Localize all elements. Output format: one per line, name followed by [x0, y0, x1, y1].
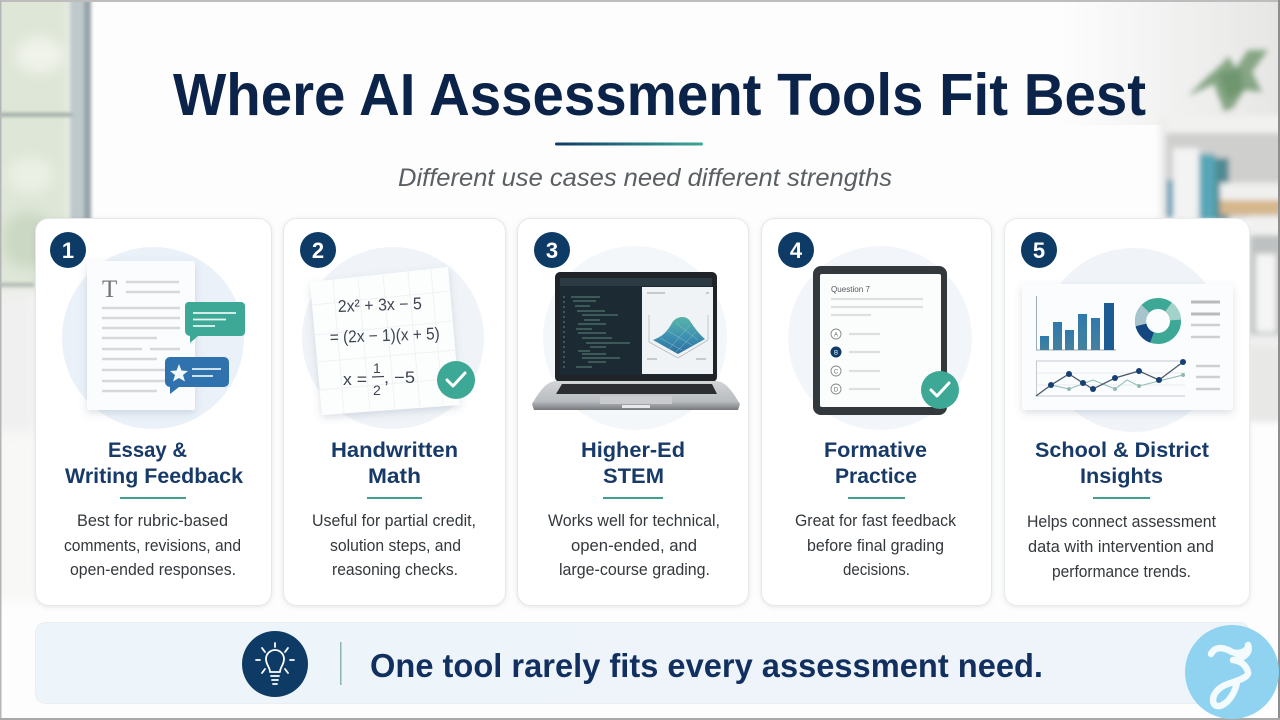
- heading: [824, 438, 927, 488]
- number badge 3: 3: [546, 238, 558, 263]
- description: reasoning checks.: [332, 561, 458, 579]
- panel: school and district insights: [1004, 218, 1250, 606]
- heading rule: [603, 497, 663, 499]
- icon: handwritten math paper: , −5: [384, 368, 415, 387]
- number badge 5: 5: [1033, 238, 1045, 263]
- heading: Insights: [1080, 464, 1163, 488]
- number badge 1: [50, 232, 86, 268]
- callout text: One tool rarely fits every assessment need.: [370, 647, 1043, 684]
- description: [312, 512, 476, 579]
- icon: tablet quiz: D: [834, 388, 839, 394]
- illustration backdrop circle: [788, 246, 972, 430]
- icon: essay document: T: [102, 276, 117, 303]
- icon: handwritten math paper: [310, 267, 460, 415]
- icon: tablet quiz: [813, 266, 947, 415]
- number badge 2: 2: [312, 238, 324, 263]
- illustration backdrop circle: [302, 247, 484, 429]
- description: Great for fast feedback: [795, 512, 957, 530]
- heading: Math: [368, 464, 421, 488]
- icon: handwritten math paper: 2: [373, 382, 381, 398]
- number badge 5: [1021, 232, 1057, 268]
- description: [1027, 513, 1216, 581]
- description: comments, revisions, and: [64, 537, 241, 555]
- icon: blue star comment bubble: [165, 357, 229, 394]
- icon: check badge: [921, 371, 959, 409]
- illustration backdrop circle: [62, 247, 244, 429]
- description: open-ended, and: [571, 537, 697, 555]
- icon: check badge: [437, 361, 475, 399]
- icon: tablet quiz: Question 7: [831, 284, 870, 294]
- heading: School & District: [1035, 438, 1209, 462]
- description: Works well for technical,: [548, 512, 720, 530]
- number badge 3: [534, 232, 570, 268]
- panel: handwritten math: [284, 218, 506, 606]
- bar chart: [1036, 296, 1116, 350]
- description: Helps connect assessment: [1027, 513, 1216, 531]
- heading: STEM: [603, 464, 664, 488]
- subtitle: Different use cases need different strengths: [398, 164, 892, 192]
- heading: Essay &: [108, 438, 187, 462]
- description: [548, 512, 720, 579]
- description: solution steps, and: [330, 537, 461, 555]
- icon: light bulb: [242, 631, 308, 697]
- icon: handwritten math paper: 2x² + 3x − 5: [337, 294, 422, 316]
- heading: Formative: [824, 438, 927, 462]
- number badge 2: [300, 232, 336, 268]
- description: performance trends.: [1052, 563, 1191, 581]
- logo badge: [1185, 625, 1279, 719]
- donut legend: [1191, 302, 1220, 314]
- title: Where AI Assessment Tools Fit Best: [173, 62, 1146, 128]
- description: before final grading: [807, 537, 944, 555]
- line chart: [1036, 359, 1186, 396]
- panel: essay and writing feedback: [36, 218, 272, 606]
- icon: handwritten math paper: 1: [373, 360, 381, 376]
- panel: higher-ed stem: [518, 218, 748, 606]
- heading: Handwritten: [331, 438, 458, 462]
- illustration backdrop circle: [543, 246, 727, 430]
- icon: green comment bubble: [185, 302, 245, 343]
- heading: Writing Feedback: [65, 464, 243, 488]
- description: large-course grading.: [559, 561, 710, 579]
- icon: handwritten math paper: = (2x − 1)(x + 5): [329, 324, 440, 347]
- heading rule: [120, 497, 186, 499]
- description: Best for rubric-based: [77, 512, 228, 530]
- heading rule: [1093, 497, 1150, 499]
- panel: formative practice: [762, 218, 992, 606]
- icon: analytics dashboard: [1022, 284, 1233, 410]
- number badge 1: 1: [62, 238, 74, 263]
- heading: [331, 438, 458, 488]
- illustration backdrop circle: [1041, 248, 1225, 432]
- icon: tablet quiz: C: [834, 370, 839, 376]
- title accent rule: [555, 142, 703, 146]
- heading rule: [367, 497, 422, 499]
- icon: handwritten math paper: x =: [343, 370, 367, 389]
- description: data with intervention and: [1028, 538, 1214, 556]
- number badge 4: [778, 232, 814, 268]
- icon: essay document: [87, 261, 195, 410]
- donut chart: [1140, 304, 1176, 338]
- heading rule: [848, 497, 905, 499]
- description: decisions.: [843, 561, 910, 579]
- heading: [65, 438, 243, 488]
- description: open-ended responses.: [70, 561, 236, 579]
- icon: laptop with code and surface plot: [532, 272, 740, 410]
- heading: Practice: [835, 464, 917, 488]
- description: [795, 512, 957, 579]
- callout banner: [36, 622, 1250, 704]
- number badge 4: 4: [790, 238, 803, 263]
- description: Useful for partial credit,: [312, 512, 476, 530]
- line chart legend: [1196, 366, 1220, 389]
- heading: [1035, 438, 1209, 488]
- description: [64, 512, 241, 579]
- heading: [581, 438, 685, 488]
- icon: tablet quiz: A: [834, 332, 838, 338]
- heading: Higher-Ed: [581, 438, 685, 462]
- icon: tablet quiz: B: [834, 350, 838, 356]
- divider: [340, 642, 342, 685]
